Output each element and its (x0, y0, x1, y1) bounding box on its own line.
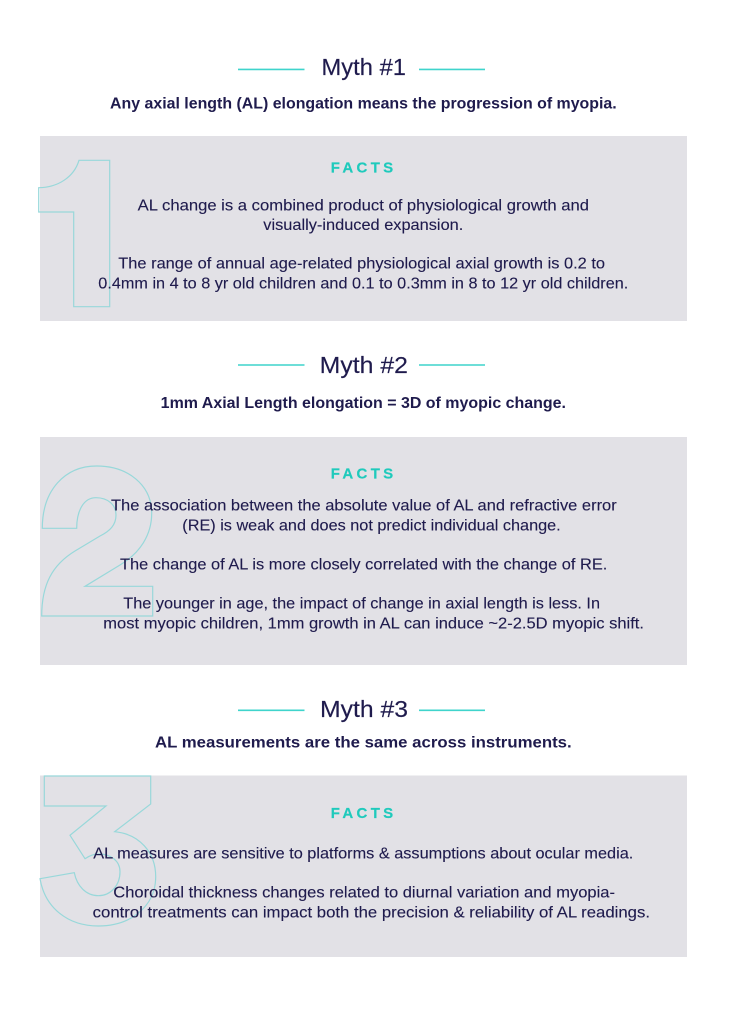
panel 3 background (40, 776, 687, 957)
facts label 3: FACTS (331, 805, 393, 822)
numeral outline 1 (39, 160, 110, 307)
panel: facts 1 (39, 136, 687, 321)
facts text 1: The range of annual age-related physiological axial growth is 0.2 to (118, 256, 605, 273)
numeral outline 2 (42, 466, 153, 616)
myth 3 statement: AL measurements are the same across instruments. (155, 734, 572, 751)
panel: facts 2 (40, 437, 687, 665)
facts text 2: The association between the absolute value of AL and refractive error (111, 498, 617, 515)
facts text 1 (98, 198, 628, 292)
facts label 1: FACTS (331, 160, 393, 176)
facts text 2: most myopic children, 1mm growth in AL can induce ~2-2.5D myopic shift. (103, 615, 644, 632)
facts text 3: AL measures are sensitive to platforms & assumptions about ocular media. (93, 845, 633, 862)
facts text 1: AL change is a combined product of physiological growth and (138, 198, 589, 215)
heading: myth 3 with rules: Myth #3 (320, 696, 408, 722)
heading: myth 1 with rules: Myth #1 (322, 54, 406, 80)
myth 2 statement: 1mm Axial Length elongation = 3D of myopic change. (161, 395, 566, 412)
panel: facts 3 (40, 776, 687, 957)
numeral outline 3 (40, 776, 156, 926)
facts text 3: control treatments can impact both the precision & reliability of AL readings. (93, 904, 650, 921)
facts text 2: The change of AL is more closely correlated with the change of RE. (120, 556, 607, 573)
myth 1 statement: Any axial length (AL) elongation means the progression of myopia. (110, 95, 617, 112)
section: myth 2 (40, 352, 687, 665)
facts text 2 (103, 498, 644, 632)
panel 2 background (40, 437, 687, 665)
panel 1 background (40, 136, 687, 321)
facts text 2: (RE) is weak and does not predict individual change. (182, 517, 561, 534)
section: myth 3 (40, 696, 687, 957)
facts text 3: Choroidal thickness changes related to diurnal variation and myopia- (113, 884, 615, 901)
facts text 1: visually-induced expansion. (263, 217, 463, 234)
section: myth 1 (39, 54, 687, 321)
facts label 2: FACTS (331, 466, 393, 482)
facts text 3 (93, 845, 650, 921)
facts text 2: The younger in age, the impact of change in axial length is less. In (123, 595, 600, 612)
facts text 1: 0.4mm in 4 to 8 yr old children and 0.1 to 0.3mm in 8 to 12 yr old children. (98, 275, 628, 292)
heading: myth 2 with rules: Myth #2 (320, 352, 408, 378)
